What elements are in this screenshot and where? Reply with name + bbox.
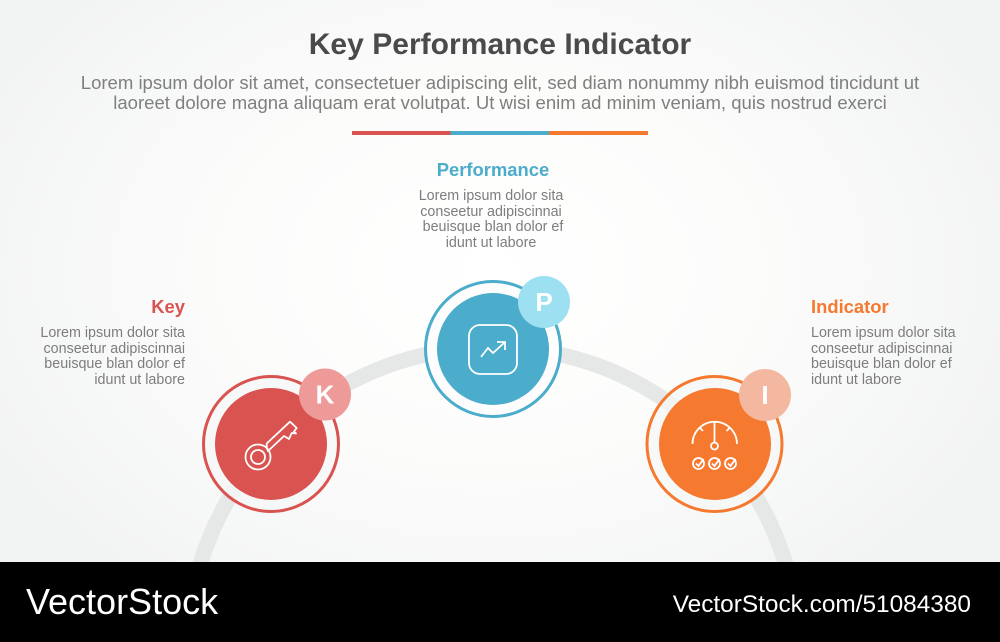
text: Indicator body: Lorem ipsum dolor sita [811, 325, 956, 341]
text: Key body: Lorem ipsum dolor sita [40, 325, 185, 341]
node: performance [426, 276, 570, 416]
badge: P [518, 276, 570, 328]
subtitle text: laoreet dolore magna aliquam erat volutpat. Ut wisi enim ad minim veniam, quis nostrud exerci [113, 92, 887, 113]
semicircular arc track [198, 347, 788, 570]
tricolor divider [352, 131, 648, 135]
icon: key [246, 422, 297, 470]
icon: growth chart [469, 325, 517, 374]
node: indicator [647, 369, 791, 512]
badge: K: K [316, 380, 335, 410]
text: Key body [40, 325, 185, 388]
text: Indicator body: idunt ut labore [811, 372, 902, 388]
text: Performance body: beuisque blan dolor ef [423, 219, 563, 235]
badge: I: I [761, 380, 769, 410]
text: Performance body [419, 188, 564, 251]
subtitle text: Lorem ipsum dolor sit amet, consectetuer adipiscing elit, sed diam nonummy nibh euismod tincidunt ut [81, 72, 919, 93]
heading: Indicator: Indicator [811, 296, 889, 317]
text: Performance body: Lorem ipsum dolor sita [419, 188, 563, 204]
text: Indicator body: beuisque blan dolor ef [811, 356, 952, 372]
heading: Performance: Performance [437, 159, 549, 180]
text: Key body: beuisque blan dolor ef [44, 356, 185, 372]
text: Key body: conseetur adipiscinnai [44, 341, 185, 357]
badge: P: P [535, 287, 553, 317]
subtitle text [81, 72, 919, 113]
text: Indicator body: conseetur adipiscinnai [811, 341, 952, 357]
text: Key body: idunt ut labore [94, 372, 185, 388]
badge: K [299, 368, 351, 420]
footer bar [0, 562, 1000, 642]
icon: gauge with checks [692, 421, 737, 469]
title: Key Performance Indicator [309, 28, 691, 61]
footer logo text: VectorStock [26, 581, 218, 622]
text: Performance body: idunt ut labore [446, 235, 536, 251]
heading: Key: Key [151, 296, 185, 317]
node: key [204, 368, 351, 512]
badge: I [739, 369, 791, 421]
text: Indicator body [811, 325, 956, 388]
footer url text: VectorStock.com/51084380 [673, 591, 971, 618]
text: Performance body: conseetur adipiscinnai [420, 204, 562, 220]
